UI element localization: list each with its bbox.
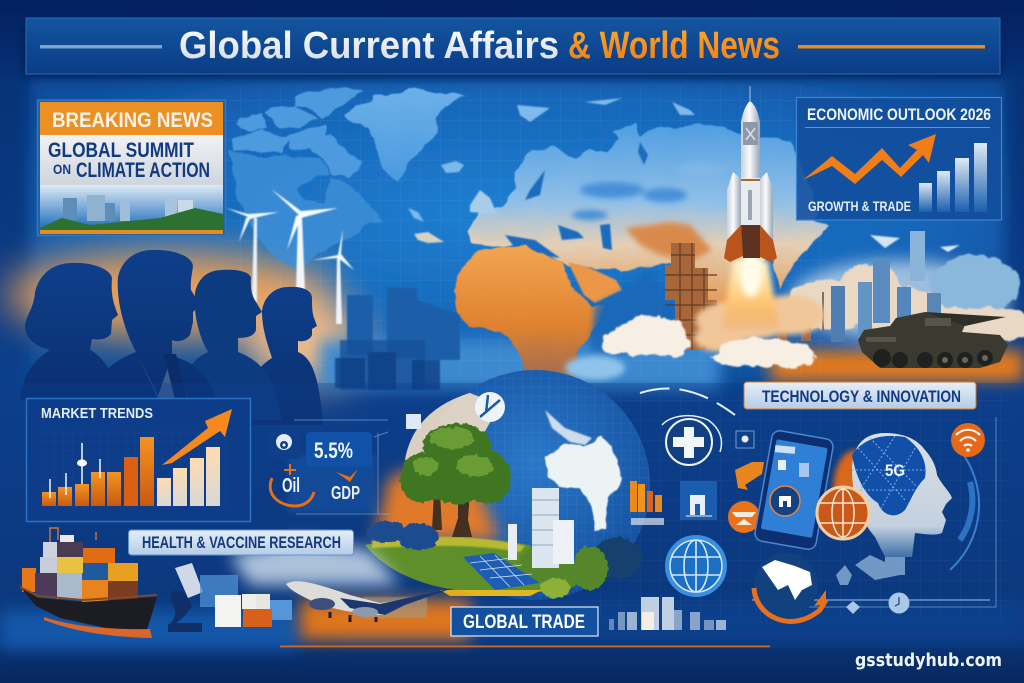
lower panel decorative band xyxy=(0,383,1024,648)
phone: interface xyxy=(775,445,795,454)
lab boxes xyxy=(200,575,292,627)
header strip xyxy=(40,102,223,135)
map: Canadian arctic xyxy=(232,88,365,178)
rule left xyxy=(40,45,162,48)
head: 5G net xyxy=(852,436,926,515)
icon: diamond marker xyxy=(846,601,860,614)
headline: GLOBAL SUMMIT xyxy=(48,139,194,162)
containers xyxy=(22,528,138,604)
icon: blue globe xyxy=(667,537,725,595)
blueprint city xyxy=(335,288,460,390)
head: orange glow xyxy=(833,450,877,530)
globe: cream landmass xyxy=(405,393,500,470)
map: Africa xyxy=(453,246,606,380)
airplane xyxy=(286,581,453,622)
cargo tower xyxy=(665,243,717,350)
icon: wifi badge xyxy=(951,423,985,457)
clouds xyxy=(565,315,814,380)
heading: market trends: MARKET TRENDS xyxy=(41,405,153,422)
arrow: rising trend xyxy=(162,409,232,465)
AI head with 5G xyxy=(833,433,952,557)
label: technology and innovation xyxy=(744,382,976,409)
map: Scattered islands xyxy=(517,98,960,252)
icon: orange globe xyxy=(817,487,869,539)
lower map band xyxy=(320,260,1024,390)
tree crowns xyxy=(400,423,511,504)
title text xyxy=(179,25,780,67)
icon: microscope xyxy=(168,563,203,632)
icon: earth with orange arrow xyxy=(754,553,826,621)
tank xyxy=(858,312,1008,368)
right skyline and clouds xyxy=(777,231,1024,345)
solar panels xyxy=(440,553,542,596)
stats cluster xyxy=(268,420,390,514)
sea and lower left scene xyxy=(0,540,770,650)
exhaust smoke xyxy=(694,295,825,352)
icon: orange delivery badge xyxy=(728,501,760,533)
person 2 xyxy=(90,250,216,402)
hull xyxy=(20,587,157,630)
bars xyxy=(919,143,987,212)
hill xyxy=(365,539,548,592)
person 4 xyxy=(244,287,323,425)
icon: eye badge xyxy=(268,431,302,459)
container ship xyxy=(20,528,157,638)
map: Greenland xyxy=(343,88,466,183)
rule right xyxy=(798,45,985,48)
globe: Europe xyxy=(545,410,592,445)
caption: GROWTH & TRADE xyxy=(808,198,911,214)
map: British Isles xyxy=(470,190,497,214)
trade city bars xyxy=(609,597,726,630)
city towers xyxy=(777,231,941,345)
rocket body xyxy=(741,101,760,235)
stat: GDP: GDP xyxy=(331,483,360,503)
label: health and vaccine research: HEALTH & VACCINE RESEARCH xyxy=(142,533,341,552)
nature scene xyxy=(365,423,642,598)
head: face and neck xyxy=(852,433,952,557)
globe badge xyxy=(475,392,505,422)
wind turbines xyxy=(226,189,354,324)
globe backdrop xyxy=(375,370,650,600)
icon: small square badge xyxy=(736,431,754,448)
icon: clock xyxy=(888,592,910,614)
panel: market trends xyxy=(26,398,250,522)
flame xyxy=(722,260,780,330)
orange glow behind leaders xyxy=(5,253,365,390)
person 1 xyxy=(20,263,120,400)
leaders silhouettes xyxy=(20,250,323,425)
title text: Global Current Affairs xyxy=(179,25,559,67)
globe: Africa xyxy=(545,436,622,532)
world map xyxy=(225,85,960,380)
bushes xyxy=(367,521,439,550)
stat: 5.5 percent: 5.5% xyxy=(314,438,353,463)
icon: orange ribbon xyxy=(735,462,764,490)
map: cloud blotches over Asia xyxy=(572,162,724,220)
smartphone xyxy=(754,429,834,551)
watermark: gsstudyhub.com xyxy=(855,650,1002,671)
label: 5G: 5G xyxy=(885,461,905,480)
label: health and vaccine research xyxy=(128,530,354,555)
map: seas xyxy=(505,120,648,258)
technology network xyxy=(640,388,996,607)
label: global trade xyxy=(451,607,598,636)
office towers xyxy=(508,488,574,568)
panel: economic outlook xyxy=(796,98,1002,220)
news image xyxy=(40,185,223,234)
map: Iceland and Atlantic islands xyxy=(408,161,464,243)
title text: & World News xyxy=(568,25,780,67)
stat: oil: Oil xyxy=(282,475,300,497)
title banner xyxy=(22,18,1002,78)
globe: orange horizon xyxy=(375,468,500,540)
headline: CLIMATE ACTION xyxy=(76,159,210,182)
label: global trade: GLOBAL TRADE xyxy=(463,612,585,633)
headline xyxy=(40,135,223,185)
rocket launch xyxy=(665,86,825,352)
map: Eurasia xyxy=(468,122,830,320)
map: Indian Ocean xyxy=(590,268,665,355)
icon: gateway tile xyxy=(680,481,717,520)
header strip: BREAKING NEWS xyxy=(52,109,213,132)
icon: orange mini bars xyxy=(630,481,664,525)
trees trunks xyxy=(452,488,472,537)
icon: medical cross xyxy=(662,416,722,465)
candlesticks xyxy=(50,443,100,498)
panel: breaking news xyxy=(38,100,226,236)
zigzag arrow xyxy=(803,134,936,184)
map: North America xyxy=(227,150,382,270)
bar chart xyxy=(42,437,220,506)
map: Asia orange highlands xyxy=(625,222,712,262)
forest right xyxy=(519,537,642,598)
person 3 xyxy=(176,270,282,420)
headline: ON xyxy=(53,161,71,177)
map: Arabia xyxy=(568,262,622,303)
label: technology and innovation: TECHNOLOGY & INNOVATION xyxy=(762,387,961,406)
